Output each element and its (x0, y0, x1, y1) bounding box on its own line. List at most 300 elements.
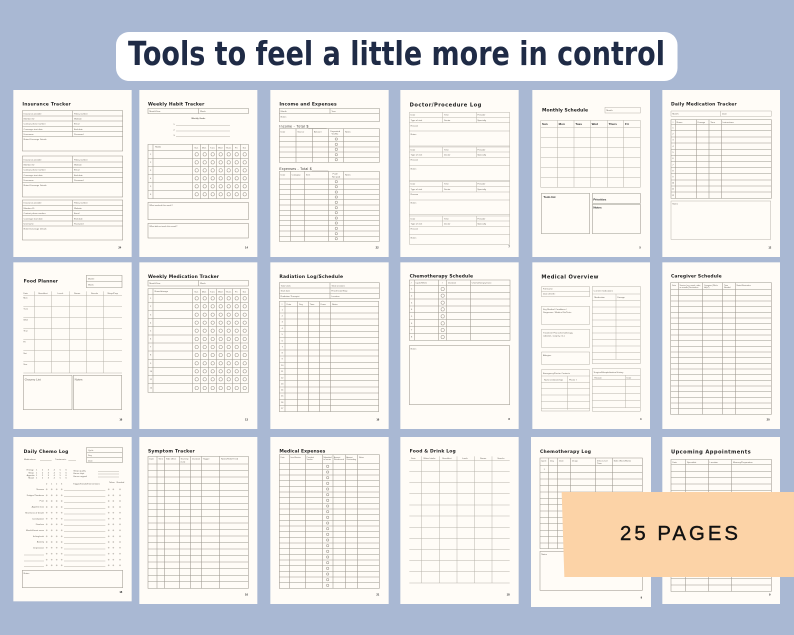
right column boxes: Dosage (617, 297, 626, 299)
chemo log table: Time (597, 463, 603, 465)
table: insurance entries: Policy number (74, 158, 88, 161)
symptom table: (1-5) (181, 461, 185, 463)
left column boxes: Key Medical Conditions / (543, 308, 567, 311)
food log grid: Lunch (462, 458, 469, 460)
month and goals: 2. (173, 129, 176, 131)
symptom rating grid: 0 (46, 483, 48, 485)
visit blocks: Doctor (444, 119, 451, 122)
symptom rating grid: Nausea (37, 489, 45, 491)
page: doctor procedure log (400, 90, 519, 257)
page: radiation log schedule (270, 262, 389, 429)
schedule table: Duration (448, 282, 457, 285)
page: food planner (13, 262, 132, 429)
left column boxes (541, 287, 590, 411)
medication grid: Sat (243, 290, 246, 293)
visit blocks: Notes (411, 236, 416, 239)
visit blocks: Doctor (444, 154, 451, 157)
expense table: Outstanding (346, 458, 356, 461)
page: symptom tracker: 16 (245, 593, 248, 597)
treatment info: Total visits (281, 284, 291, 287)
heading: upcoming appointments: Upcoming Appointments (671, 450, 751, 456)
reminders and wellness ratings: 1 2 3 4 5 6 (36, 478, 67, 480)
medication grid: 1 (150, 298, 152, 300)
table: insurance entries: Notes/Coverage Details (24, 138, 46, 141)
habit grid (148, 144, 248, 199)
radiation table: 5 (282, 334, 284, 336)
left column boxes: Date of birth: (543, 293, 556, 296)
habit grid: 5 (150, 186, 152, 188)
title banner (116, 32, 678, 81)
calendar grid: Thurs (609, 122, 617, 126)
heading: food and drink log: Food & Drink Log (410, 449, 456, 455)
reminders and wellness ratings (24, 458, 119, 480)
symptom table: Duration (192, 458, 201, 461)
treatment info (279, 283, 379, 299)
notes box: Notes (411, 347, 416, 350)
medication grid: 9 (150, 363, 152, 365)
medication table: Instructions (723, 121, 734, 124)
page: medical expenses (270, 437, 389, 604)
medication grid: Mon (202, 291, 207, 293)
radiation table: Time (310, 304, 315, 306)
visit blocks: Reason (411, 229, 419, 231)
todo list, priorities and notes: Priorities (593, 197, 607, 201)
table: insurance entries: Insurance provider (24, 202, 42, 205)
visit blocks: Doctor (444, 223, 451, 226)
heading: radiation log schedule: Radiation Log/Schedule (279, 274, 343, 280)
page: daily medication tracker (662, 90, 780, 257)
food log grid: Water Intake (423, 457, 436, 460)
notes box (671, 201, 771, 239)
income table: Income - Total $ (279, 124, 308, 128)
chemo log table: Side effects/Notes (614, 460, 631, 463)
schedule table: # (411, 283, 413, 285)
visit blocks (409, 112, 510, 244)
reminders and wellness ratings: Mood (28, 478, 35, 480)
expenses table: Item (306, 173, 310, 176)
table: insurance entries: Contact phone number (24, 212, 46, 215)
month and goals: Month/Year: (149, 110, 161, 113)
right column boxes: Reason (594, 377, 603, 379)
food log grid: Dinner (480, 457, 487, 460)
radiation table: 14 (281, 390, 284, 392)
symptom rating grid: Pain (40, 501, 45, 503)
table: insurance entries: End date (74, 128, 83, 131)
meal grid: Sat (23, 352, 27, 355)
medication grid: Thurs (226, 290, 231, 293)
heading: weekly medication tracker: Weekly Medication Tracker (148, 274, 220, 280)
heading: food planner: Food Planner (24, 278, 59, 284)
expense table: Reimbursed (334, 459, 344, 461)
appointments table: Location (710, 461, 719, 464)
medication table: Dosage (698, 122, 706, 124)
radiation table: 13 (281, 383, 284, 385)
visit blocks: Notes (411, 133, 416, 136)
appointments table: Specialist (687, 461, 697, 464)
page: medical expenses: 21 (376, 593, 380, 597)
medication table: 11 (672, 189, 675, 191)
month and date (671, 111, 771, 116)
radiation table (279, 301, 379, 412)
visit blocks: Type of visit (411, 223, 422, 226)
page: insurance tracker (13, 90, 132, 257)
visit blocks: Provider (477, 148, 486, 151)
visit blocks: Notes (411, 202, 416, 205)
table: insurance entries: Policy number (74, 202, 88, 205)
table: insurance entries: Coverage start date (24, 174, 43, 177)
expenses table (279, 167, 379, 241)
symptom rating grid: Trigger/Details/Interventions (73, 482, 100, 485)
symptom rating grid: 2 (56, 483, 58, 485)
schedule table: 7 (411, 330, 413, 332)
meal grid: Fri (23, 341, 26, 344)
symptom table: Severity (181, 458, 189, 461)
medication table: 3 (672, 140, 674, 142)
chemo log table: 1 (544, 469, 546, 471)
expense table (279, 455, 379, 588)
habit grid: Fri (235, 146, 238, 149)
radiation table: 10 (281, 365, 284, 367)
notes box: Notes (541, 553, 547, 556)
page: food planner: 16 (119, 418, 123, 422)
reflection boxes: What did not work this week? (149, 225, 178, 228)
radiation table: 4 (282, 328, 284, 330)
radiation table: 7 (282, 346, 284, 348)
visit blocks: Type of visit (411, 119, 422, 122)
todo list, priorities and notes (541, 193, 640, 234)
visit blocks: Reason (411, 160, 419, 162)
month and week: Month/Year: (149, 282, 161, 285)
caregiver table (671, 283, 771, 414)
meal grid: Thur (23, 330, 28, 333)
left column boxes: Name (relationship) (544, 378, 563, 381)
schedule table: 3 (411, 302, 413, 304)
page: upcoming appointments: 9 (769, 593, 771, 597)
right column boxes: Date (627, 376, 632, 379)
grocery list and notes: Notes (75, 377, 83, 381)
medication table (671, 120, 771, 198)
radiation table: 11 (281, 371, 284, 373)
expense table: Item/Service (291, 456, 301, 459)
medication grid: 12 (150, 388, 153, 390)
table: insurance entries: Website (74, 164, 83, 167)
visit blocks: Specialty (477, 188, 487, 191)
page: chemotherapy log (531, 437, 651, 607)
radiation table: Day (299, 304, 304, 306)
visit blocks: Time (444, 115, 450, 117)
month and goals: 3. (173, 135, 176, 137)
right column boxes: Medication (594, 296, 606, 299)
page: caregiver schedule: 20 (767, 418, 770, 422)
radiation table: # (281, 304, 283, 306)
food log grid: Breakfast (442, 457, 452, 460)
table: insurance entries: Insurance provider (24, 158, 42, 161)
habit grid: Sat (243, 146, 246, 149)
todo list, priorities and notes: Todo list (543, 195, 556, 199)
radiation table: 15 (281, 396, 284, 398)
habit grid: Thurs (226, 146, 231, 149)
visit blocks: Specialty (477, 119, 487, 122)
medication grid: 8 (150, 355, 152, 357)
callout: 25 pages (562, 492, 794, 577)
meal grid: Snacks (91, 293, 98, 295)
expense table: Vendor (307, 459, 313, 461)
month and notes: Notes (281, 115, 286, 118)
table: insurance entries: Member ID (24, 117, 35, 120)
habit grid: 6 (150, 194, 152, 196)
symptom table: Date (149, 458, 155, 461)
medication table: 10 (672, 183, 675, 185)
table: insurance entries: Username (24, 133, 34, 136)
medication table: 2 (672, 134, 674, 136)
radiation table: 8 (282, 353, 284, 355)
visit blocks: Provider (477, 217, 486, 220)
expenses table: Paid/ (333, 174, 338, 176)
table: insurance entries: Password (74, 179, 84, 182)
symptom rating grid: Fatigue/Tiredness (27, 494, 44, 497)
food log grid: Snacks (497, 458, 504, 460)
table: insurance entries: Password (74, 222, 84, 225)
habit grid: Sun (194, 147, 199, 149)
page: caregiver schedule (662, 262, 780, 429)
habit grid: Tues (210, 147, 215, 149)
expense table: Amount (334, 456, 341, 459)
visit blocks: Date (411, 217, 416, 220)
reminders and wellness ratings: Sleep (28, 472, 35, 474)
month and date: Month: (672, 113, 679, 116)
medication grid: 5 (150, 330, 152, 332)
page: food and drink log: 18 (507, 593, 510, 597)
heading: symptom tracker: Symptom Tracker (148, 449, 195, 455)
page: chemotherapy log: 9 (641, 595, 643, 599)
cycle day date box: Date (88, 459, 93, 462)
reminders and wellness ratings: 1 2 3 4 5 6 (36, 472, 67, 474)
habit grid: 3 (150, 170, 152, 172)
schedule table: Cycle/Week (415, 283, 428, 285)
calendar grid: Fri (625, 122, 629, 126)
habit grid: Habits (155, 146, 161, 149)
month and notes: Month (281, 110, 287, 113)
schedule table: 8 (411, 337, 413, 339)
table: insurance entries: Notes/Coverage Details (24, 184, 46, 187)
expense table: Submitted (323, 456, 332, 459)
left column boxes: Phone # (569, 379, 578, 381)
notes box (540, 551, 642, 590)
schedule table: 2 (411, 295, 413, 297)
expenses table: Expenses - Total $ (279, 167, 312, 171)
symptom rating grid: 1 (51, 483, 53, 485)
todo list, priorities and notes: Notes (593, 206, 602, 210)
table: insurance entries (22, 111, 123, 240)
treatment info: Location (331, 295, 340, 298)
symptom rating grid: Itching/rash (33, 535, 45, 538)
visit blocks: Specialty (477, 223, 487, 226)
heading: medical expenses: Medical Expenses (279, 449, 326, 455)
month and week box: Month: (88, 277, 95, 280)
medication table: 6 (672, 158, 674, 160)
page: monthly schedule (532, 90, 650, 257)
radiation table: 16 (281, 402, 284, 404)
chemo log table: Date (559, 460, 564, 463)
caregiver table: or errands) Destination (680, 286, 698, 289)
medication grid: 6 (150, 339, 152, 341)
habit grid: 2 (150, 162, 152, 164)
income table: Notes (345, 131, 351, 134)
reminders and wellness ratings: 1 2 3 4 5 6 (36, 475, 67, 477)
reflection boxes: What worked this week? (149, 204, 174, 207)
month and week (148, 280, 248, 286)
page: income and expenses: 22 (376, 246, 379, 250)
right column boxes (592, 286, 640, 411)
habit grid: 1 (150, 154, 152, 156)
heading: income and expenses: Income and Expenses (279, 102, 337, 108)
radiation table: 2 (282, 316, 284, 318)
page: income and expenses (270, 90, 389, 257)
left column boxes: Treatment Plan (chemotherapy, (543, 331, 574, 334)
radiation table: 1 (282, 309, 284, 311)
expenses table: Category (292, 173, 301, 176)
table: insurance entries: Email (74, 124, 80, 126)
symptom rating grid: Shortness of breath (25, 511, 45, 514)
expense table: Date (281, 456, 285, 459)
medication table: # (672, 122, 674, 124)
meal grid: Lunch (57, 293, 64, 295)
medication grid (148, 289, 248, 392)
reminders and wellness ratings: Energy (27, 469, 34, 472)
reminders and wellness ratings: Hours napped (73, 475, 88, 478)
medication table: 9 (672, 177, 674, 179)
schedule table: Chemotherapy Dose (472, 282, 492, 285)
visit blocks: Reason (411, 194, 419, 196)
income table: Deposited (330, 130, 341, 133)
page: weekly habit tracker (139, 90, 257, 257)
treatment info: Radiation Therapist (281, 295, 300, 298)
appointments table: Date (672, 461, 678, 464)
medication grid: 4 (150, 322, 152, 324)
medication grid: 10 (150, 371, 153, 373)
left column boxes: radiation, surgery, etc.) (543, 334, 565, 337)
expense table: Notes (359, 456, 364, 459)
table: insurance entries: Email (74, 170, 80, 172)
grocery list and notes (23, 375, 122, 410)
visit blocks: Notes (411, 167, 416, 170)
symptom rating grid: Anxiety (37, 541, 45, 544)
table: insurance entries: End date (74, 217, 83, 220)
meal grid: Breakfast (38, 292, 48, 295)
month and goals (148, 108, 248, 137)
visit blocks: Time (444, 184, 450, 186)
treatment info: Total sessions (331, 284, 345, 287)
appointments table: Memory/Preparation (733, 461, 753, 464)
habit grid: 4 (150, 178, 152, 180)
heading: doctor procedure log: Doctor/Procedure Log (410, 103, 482, 109)
calendar grid: Tues (575, 122, 582, 126)
heading: monthly schedule: Monthly Schedule (542, 108, 588, 114)
symptom table: Time (158, 459, 164, 461)
visit blocks: Provider (477, 183, 486, 186)
schedule table: 6 (411, 323, 413, 325)
month box: Month: (606, 109, 613, 112)
radiation table: 12 (281, 377, 284, 379)
cycle day date box: Day (88, 455, 93, 457)
chemo log table: Infus Level (597, 460, 608, 462)
month and date: Date: (722, 113, 728, 116)
schedule table: 1 (411, 289, 413, 291)
callout: 25 pages: 25 PAGES (620, 523, 738, 545)
symptom rating grid: Mouth/throat sores (26, 529, 44, 532)
income table: Date (281, 131, 286, 134)
heading: medical overview: Medical Overview (541, 275, 599, 281)
reflection boxes (148, 202, 248, 238)
medication grid: Tues (210, 291, 215, 293)
chemo log table: Day (550, 461, 555, 463)
page: daily chemo log: 18 (119, 590, 123, 594)
expense table: Amount (346, 456, 353, 459)
symptom rating grid: Taken (109, 482, 116, 484)
cycle day date box (87, 447, 122, 463)
visit blocks: Time (444, 218, 450, 220)
medication grid: Sun (194, 291, 199, 293)
meal grid: Mon (23, 298, 28, 300)
medication table: 4 (672, 146, 674, 148)
table: insurance entries: Contact phone number (24, 169, 46, 172)
symptom rating grid: Constipation (32, 517, 45, 520)
reminders and wellness ratings: Treatments: (55, 458, 67, 461)
radiation table: Notes (332, 303, 338, 306)
notes box: Notes (672, 203, 678, 206)
symptom table (148, 456, 248, 588)
page: medical overview (532, 262, 650, 429)
meal grid: Wed (23, 320, 29, 322)
caregiver table: Needed (724, 287, 730, 289)
visit blocks: Reason (411, 125, 419, 127)
table: insurance entries: Contact phone number (24, 123, 46, 126)
income table: Amount (314, 131, 322, 134)
radiation table: 6 (282, 340, 284, 342)
medication table: 12 (672, 195, 675, 197)
table: insurance entries: Notes/Coverage Details (24, 227, 46, 230)
left column boxes: Full name: (543, 289, 553, 291)
symptom table: Side effect (166, 458, 177, 461)
heading: daily chemo log: Daily Chemo Log (24, 449, 68, 455)
reminders and wellness ratings: 1 2 3 4 5 6 (36, 470, 67, 472)
notes box: Notes (24, 572, 29, 575)
table: insurance entries: Email (74, 213, 80, 215)
table: insurance entries: Member ID (24, 164, 35, 167)
page: food and drink log (400, 437, 519, 604)
page: chemotherapy schedule (400, 262, 519, 429)
reminders and wellness ratings: Sleep quality (73, 469, 87, 472)
schedule table: 4 (411, 309, 413, 311)
food log grid (409, 456, 510, 583)
heading: daily medication tracker: Daily Medication Tracker (671, 102, 737, 108)
radiation table: Done (321, 304, 327, 306)
radiation table: 9 (282, 359, 284, 361)
medication grid: Fri (235, 290, 238, 293)
income table: Source (297, 131, 305, 134)
notes box (22, 570, 123, 588)
page: weekly habit tracker: 14 (245, 246, 248, 250)
page: weekly medication tracker: 13 (245, 418, 248, 422)
medication grid: 11 (150, 379, 153, 381)
visit blocks: Date (411, 183, 416, 186)
expenses table: Not paid (332, 175, 341, 178)
symptom rating grid: Needed (117, 482, 125, 484)
schedule table (409, 280, 510, 340)
expenses table: Notes (345, 173, 351, 176)
visit blocks: Date (411, 114, 416, 117)
month and week box (86, 275, 122, 288)
